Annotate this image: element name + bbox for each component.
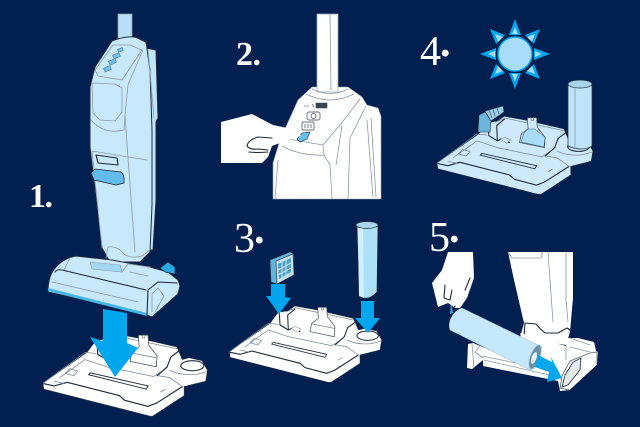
step 5 number: 5: [429, 215, 450, 261]
step 4 number: .: [440, 20, 450, 66]
step 1: tray: [43, 334, 208, 416]
step 5: roller: [449, 308, 544, 371]
step 4 number: 4: [420, 29, 441, 75]
step 5: arrow: [535, 355, 562, 382]
step 5: floor head frame: [467, 333, 598, 391]
step 4: tray: [437, 116, 593, 194]
vacuum latch: [96, 155, 118, 165]
step 4: sun icon: [480, 19, 550, 89]
step 1 number: 1.: [29, 178, 52, 215]
step 3: tray: [229, 306, 382, 382]
step 1: vacuum floor head: [48, 256, 180, 317]
step 3 number: 3: [234, 216, 255, 262]
step 4: peg highlight: [521, 129, 545, 147]
step 2: vacuum close-up: [221, 14, 381, 199]
step 2 number: 2.: [236, 36, 260, 73]
vacuum buttons: [103, 48, 123, 72]
step 5: hand: [432, 252, 474, 314]
blue wheel knob: [160, 262, 175, 274]
step 2 lit button: [297, 132, 310, 142]
vacuum body: [90, 37, 152, 262]
step 3: cylinder filter: [356, 222, 378, 298]
vacuum control panel: [95, 45, 142, 80]
step 4: filter drying: [478, 106, 504, 132]
vacuum details: [92, 83, 122, 121]
vacuum rear column: [140, 48, 158, 250]
step 1: down arrow: [90, 309, 138, 377]
step 2 indicator icons: [304, 103, 327, 108]
step 5 number: .: [449, 206, 460, 252]
step 2 hand: [221, 114, 301, 163]
step 1: upright vacuum: [90, 14, 158, 262]
vacuum handle: [91, 169, 124, 185]
vacuum lower neck: [106, 247, 150, 258]
step 3: filter: [270, 252, 294, 284]
step 5: vacuum body: [508, 252, 573, 345]
step 3 number: .: [254, 207, 264, 253]
step 3: cylinder arrow: [355, 301, 380, 333]
step 4: cylinder drying: [568, 80, 592, 149]
vacuum pole: [118, 14, 132, 40]
step 3: filter arrow: [266, 284, 291, 314]
step 2 buttons: [302, 112, 320, 130]
